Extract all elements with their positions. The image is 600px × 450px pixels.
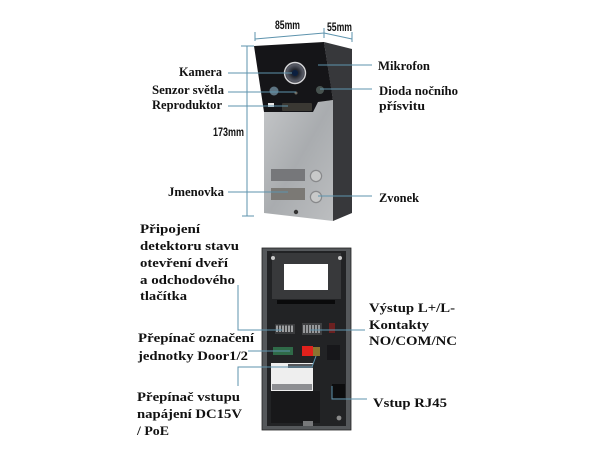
label: Výstup L+/L- Kontakty: NO/COM/NC (369, 333, 457, 348)
white label sticker (271, 363, 313, 391)
label: Výstup L+/L- Kontakty: Kontakty (369, 317, 430, 332)
front view of door station (254, 42, 352, 221)
terminal block 2 (302, 323, 322, 335)
label: Přepínač vstupu napájení: / PoE (136, 423, 169, 438)
label: Kamera (179, 64, 292, 79)
label: Jmenovka: Jmenovka (168, 184, 224, 199)
dark inner body (267, 251, 346, 426)
label: Reproduktor: Reproduktor (152, 97, 222, 112)
sticker header (288, 364, 313, 368)
label: Dioda nočního přísvitu (320, 83, 458, 113)
corner screws (271, 256, 342, 260)
speaker grille (282, 103, 312, 111)
camera lens (284, 62, 306, 84)
label: Kamera: Kamera (179, 64, 222, 79)
square socket (327, 345, 340, 360)
label: Připojení detektoru (140, 221, 282, 330)
red power switch (302, 346, 313, 356)
rear view of door station (262, 248, 351, 430)
label: Přepínač vstupu napájení: napájení DC15V (137, 406, 243, 421)
label: Zvonek (318, 190, 420, 205)
yellow-black connector (313, 347, 320, 356)
label: Připojení detektoru: Připojení (140, 221, 200, 236)
label: Vstup RJ45 (332, 386, 448, 410)
light sensor (270, 86, 278, 96)
RJ45 recess (332, 384, 345, 398)
dimension 85mm: 85mm (275, 20, 300, 32)
green DIP switch (273, 347, 293, 355)
label: Připojení detektoru: otevření dveří (140, 255, 228, 270)
label: Přepínač označení jednotky: Přepínač označení (138, 330, 254, 345)
label: Připojení detektoru: detektoru stavu (140, 238, 239, 253)
label: Vstup RJ45: Vstup RJ45 (373, 395, 448, 410)
label: Přepínač vstupu napájení: Přepínač vstupu (137, 389, 240, 404)
label: Přepínač vstupu napájení (136, 356, 316, 438)
name plate 2 (271, 188, 305, 200)
white window (284, 264, 328, 290)
dark slot (277, 300, 335, 304)
terminal block 1 (275, 324, 295, 334)
night LED (316, 86, 324, 94)
label: Výstup L+/L- Kontakty (310, 300, 457, 348)
label: Zvonek: Zvonek (379, 190, 420, 205)
outer frame (262, 248, 351, 430)
label: Připojení detektoru: a odchodového (140, 272, 235, 287)
bottom notch (303, 421, 313, 426)
label: Jmenovka (168, 184, 288, 199)
label: Mikrofon (318, 58, 431, 73)
status icons (268, 103, 274, 107)
dimension 85mm (255, 20, 324, 41)
lower cover (271, 391, 320, 423)
name plate 1 (271, 169, 305, 181)
label: Výstup L+/L- Kontakty: Výstup L+/L- (369, 300, 455, 315)
label: Dioda nočního přísvitu: Dioda nočního (379, 83, 458, 98)
label: Přepínač označení jednotky (137, 330, 290, 363)
dimension 55mm (324, 22, 352, 42)
side housing (324, 42, 352, 221)
terminal block 2 pins (304, 325, 319, 333)
black hood (254, 42, 333, 112)
label: Dioda nočního přísvitu: přísvitu (379, 98, 425, 113)
steel front plate (264, 100, 333, 221)
label: Reproduktor (152, 97, 288, 112)
label: Přepínač označení jednotky: jednotky Door1/2 (137, 348, 248, 363)
dimension 55mm: 55mm (327, 22, 352, 34)
bell button 2 (310, 191, 322, 203)
sticker footer (272, 384, 312, 390)
upper module (272, 253, 341, 299)
terminal block 1 pins (277, 326, 292, 332)
label: Mikrofon: Mikrofon (378, 58, 431, 73)
dimension 173mm (213, 46, 254, 216)
small sensor dot (294, 92, 298, 94)
screw (294, 210, 298, 214)
label: Připojení detektoru: tlačítka (140, 288, 188, 303)
red relay terminal (329, 323, 335, 333)
bell button 1 (310, 170, 322, 182)
dimension 173mm: 173mm (213, 127, 244, 139)
label: Senzor světla: Senzor světla (152, 82, 224, 97)
bottom screw (337, 416, 341, 420)
